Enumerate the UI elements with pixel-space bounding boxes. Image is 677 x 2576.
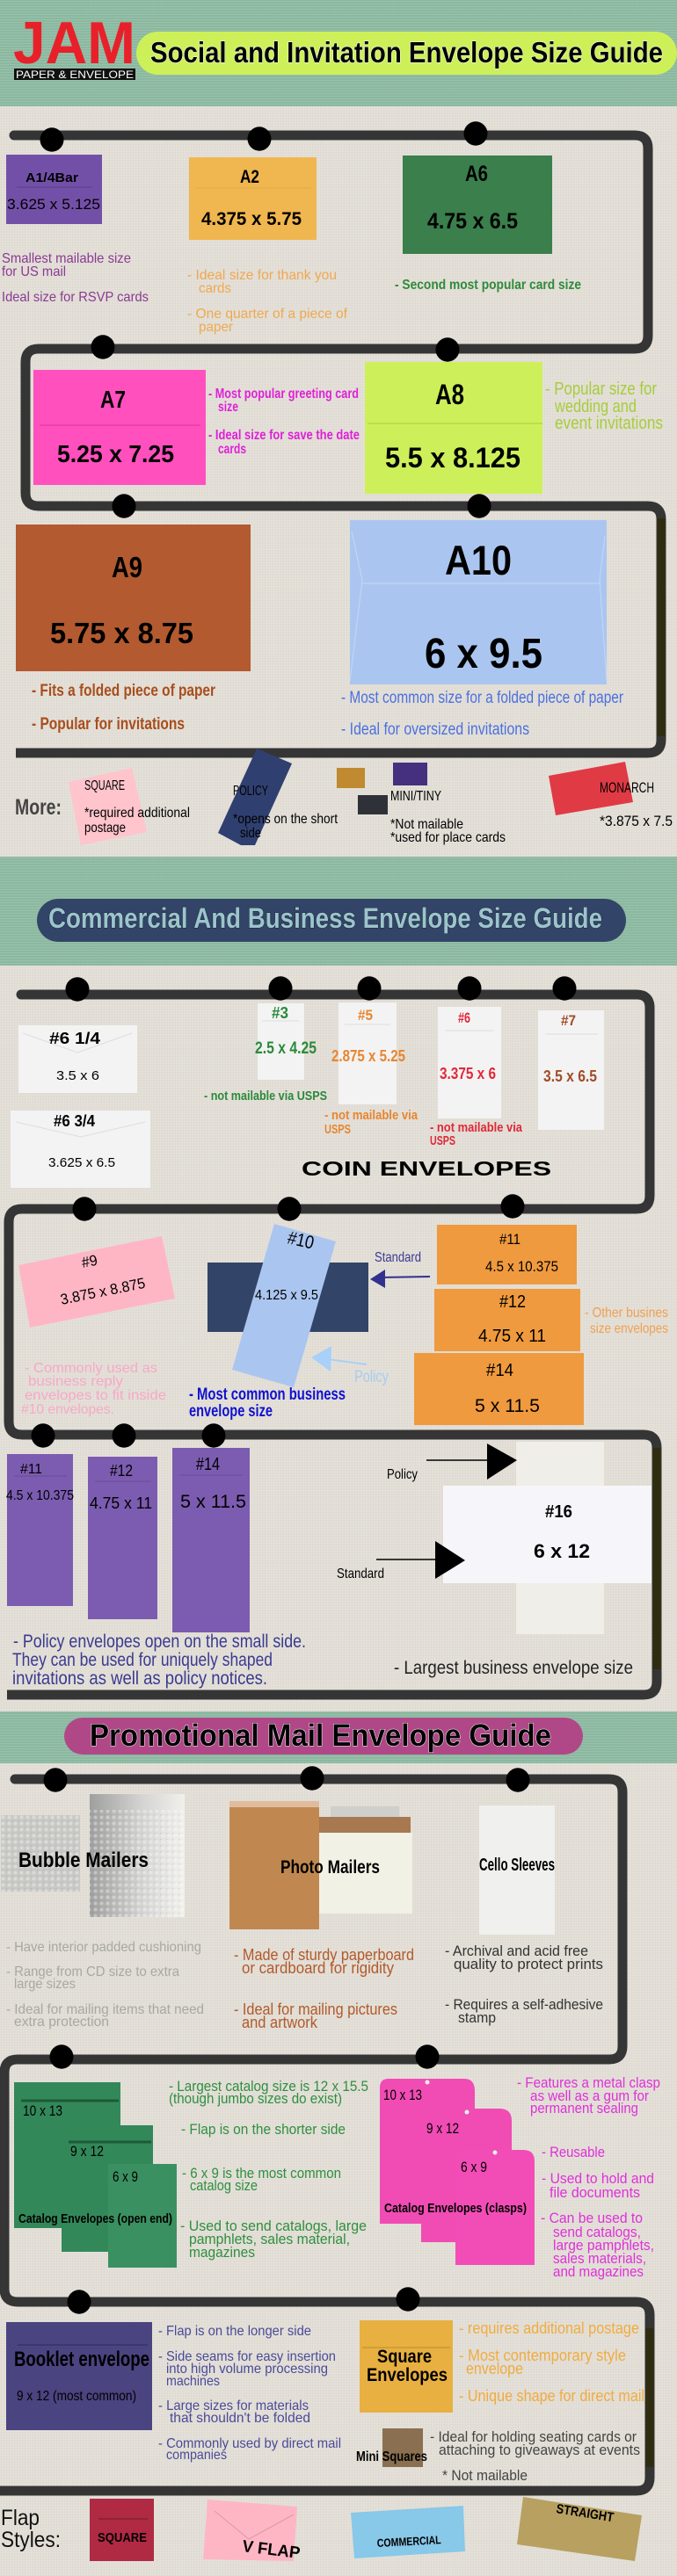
notes: square <box>459 2319 644 2405</box>
envelope: mini/tiny <box>337 763 506 845</box>
notes: A1/4Bar: Smallest mailable size <box>2 251 131 266</box>
notes: mini squares: attaching to giveaways at events <box>439 2442 640 2458</box>
flap: straight: STRAIGHT <box>555 2501 615 2525</box>
notes: catalog clasps: and magazines <box>553 2263 644 2280</box>
envelopes: catalog clasps: 6 x 9 <box>461 2159 487 2175</box>
envelope: #14 policy: #14 <box>196 1455 220 1474</box>
image: bubble mailers <box>1 1794 185 1917</box>
envelope: #3 <box>255 1003 317 1080</box>
envelope: #7: 3.5 x 6.5 <box>543 1067 597 1085</box>
note: #5: - not mailable via <box>324 1108 419 1123</box>
notes: square: - requires additional postage <box>459 2319 639 2337</box>
envelope: A6 <box>403 156 552 254</box>
notes: catalog open end: pamphlets, sales material, <box>189 2231 350 2247</box>
notes: bubble mailers: - Have interior padded cushioning <box>6 1940 201 1955</box>
envelopes: catalog clasps: 10 x 13 <box>383 2087 422 2103</box>
notes: mini squares: - Ideal for holding seating cards or <box>430 2428 637 2445</box>
notes: square: envelope <box>466 2360 523 2377</box>
title: commercial and business: Commercial And Business Envelope Size Guide <box>48 902 602 934</box>
notes: A7: cards <box>218 442 246 457</box>
notes: A1/4Bar <box>2 251 149 305</box>
envelope: #7 <box>538 1010 604 1130</box>
notes: catalog open end: (though jumbo sizes do exist) <box>169 2090 342 2107</box>
envelope: square: SQUARE <box>84 778 125 793</box>
notes: #9: envelopes to fit inside <box>25 1388 166 1403</box>
envelope: #6: 3.375 x 6 <box>440 1065 496 1082</box>
envelope: square <box>69 768 190 845</box>
notes: photo mailers <box>234 1946 414 2031</box>
note: A6: - Second most popular card size <box>395 278 581 293</box>
envelope: policy: POLICY <box>233 784 268 799</box>
envelope: policy <box>218 749 338 845</box>
notes: catalog clasps: - Can be used to <box>541 2210 643 2226</box>
note: #6 <box>430 1120 523 1148</box>
envelope: #12 orange: #12 <box>499 1292 526 1312</box>
envelope: #16: #16 <box>545 1502 572 1522</box>
notes: bubble mailers: extra protection <box>14 2015 109 2030</box>
envelope: #16 <box>443 1442 652 1634</box>
notes: A8: wedding and <box>554 397 637 416</box>
notes: catalog clasps: permanent sealing <box>530 2100 638 2117</box>
arrow: standard to #16: Standard <box>337 1567 384 1581</box>
image: bubble mailers: Bubble Mailers <box>18 1849 149 1872</box>
notes: A10 <box>341 689 624 739</box>
envelopes: catalog open end: 6 x 9 <box>113 2168 138 2185</box>
notes: booklet: machines <box>166 2374 220 2389</box>
envelope: A8: 5.5 x 8.125 <box>385 442 520 474</box>
notes: #9 <box>21 1361 166 1417</box>
envelope: #12 policy: #12 <box>110 1462 133 1480</box>
envelope: A10: 6 x 9.5 <box>425 631 542 677</box>
notes: booklet: into high volume processing <box>166 2362 328 2377</box>
envelope: #9: #9 <box>80 1252 98 1271</box>
envelope: A9: 5.75 x 8.75 <box>50 617 193 649</box>
notes: catalog clasps: - Reusable <box>542 2144 605 2160</box>
envelope: square: Square <box>377 2347 432 2367</box>
notes: catalog open end: catalog size <box>190 2177 258 2194</box>
notes: A2: - One quarter of a piece of <box>187 307 348 322</box>
notes: cello sleeves: - Archival and acid free <box>445 1943 588 1959</box>
notes: catalog clasps: send catalogs, <box>553 2224 641 2240</box>
notes: bubble mailers: - Range from CD size to extra <box>6 1965 179 1979</box>
envelope: #10 standard and policy <box>207 1224 368 1387</box>
notes: photo mailers: - Ideal for mailing pictures <box>234 2001 397 2018</box>
envelopes: catalog clasps <box>380 2079 535 2265</box>
flap: straight <box>517 2497 642 2561</box>
note: #5: USPS <box>324 1122 351 1137</box>
image: photo mailers <box>229 1801 412 1929</box>
notes: catalog clasps: file documents <box>550 2184 640 2201</box>
notes: #9: business reply <box>28 1374 123 1389</box>
notes: A2: paper <box>199 320 234 335</box>
notes: square: - Unique shape for direct mail <box>459 2387 644 2405</box>
envelope: #11 policy: #11 <box>20 1462 42 1477</box>
envelope: mini/tiny: *used for place cards <box>390 830 506 845</box>
notes: #10: - Most common business <box>189 1386 346 1404</box>
envelope: square <box>360 2320 453 2413</box>
notes: cello sleeves: quality to protect prints <box>454 1956 603 1972</box>
envelope: booklet <box>6 2322 152 2430</box>
envelope: #3: 2.5 x 4.25 <box>255 1039 317 1058</box>
envelope: monarch: MONARCH <box>600 779 654 796</box>
notes: A7 <box>208 387 360 457</box>
notes: A9: - Fits a folded piece of paper <box>32 682 215 700</box>
envelope: #11 orange: 4.5 x 10.375 <box>485 1258 558 1275</box>
envelope: A8 <box>365 362 542 494</box>
envelope: policy: *opens on the short <box>233 812 338 827</box>
envelope: #11 orange <box>437 1225 577 1284</box>
notes: A8: - Popular size for <box>545 380 657 399</box>
notes: cello sleeves: stamp <box>458 2009 496 2026</box>
envelope: A2 <box>189 157 317 240</box>
envelopes: catalog open end: 9 x 12 <box>70 2143 104 2160</box>
envelope: #6 1/4: 3.5 x 6 <box>56 1068 99 1083</box>
notes: A2: - Ideal size for thank you <box>187 268 337 283</box>
envelope: A1/4Bar: A1/4Bar <box>25 170 78 185</box>
arrow: policy: Policy <box>354 1368 389 1386</box>
envelopes: catalog clasps: Catalog Envelopes (clasps) <box>384 2201 527 2216</box>
notes: policy envelopes: - Policy envelopes open on the small side. <box>13 1632 306 1652</box>
notes: policy envelopes: They can be used for uniquely shaped <box>12 1650 273 1670</box>
notes: mini squares <box>430 2428 640 2484</box>
note: #6: USPS <box>430 1133 455 1148</box>
note: other business sizes <box>585 1306 668 1336</box>
envelope: A6: A6 <box>465 162 488 186</box>
envelope: policy: side <box>240 826 261 841</box>
envelope: A2: 4.375 x 5.75 <box>201 209 302 229</box>
envelope: A10: A10 <box>445 537 512 583</box>
notes: catalog open end: - Flap is on the shorter side <box>181 2121 346 2138</box>
envelope: booklet: Booklet envelope <box>14 2348 149 2371</box>
envelope: #11 policy <box>6 1454 74 1606</box>
notes: #10: envelope size <box>189 1402 273 1421</box>
note: #5 <box>324 1108 419 1137</box>
note: #6: - not mailable via <box>430 1120 523 1135</box>
envelope: #5: 2.875 x 5.25 <box>331 1047 405 1065</box>
envelope: A7: A7 <box>100 386 126 413</box>
notes: catalog clasps <box>517 2074 660 2280</box>
notes: A9 <box>32 682 215 734</box>
notes: catalog clasps: as well as a gum for <box>530 2088 649 2104</box>
notes: bubble mailers: - Ideal for mailing items that need <box>6 2002 204 2017</box>
title: commercial and business <box>37 899 626 942</box>
envelope: #6 1/4: #6 1/4 <box>49 1030 100 1047</box>
label: coin envelopes: COIN ENVELOPES <box>302 1157 551 1180</box>
logo: JAM Paper & Envelope: JAM <box>13 10 135 76</box>
envelopes: catalog clasps: 9 x 12 <box>426 2120 459 2137</box>
envelope: #12 orange <box>434 1289 580 1351</box>
notes: policy envelopes: invitations as well as policy notices. <box>12 1668 267 1689</box>
envelope: #14 orange <box>414 1353 584 1425</box>
notes: A10: - Ideal for oversized invitations <box>341 720 529 739</box>
envelope: #11 policy: 4.5 x 10.375 <box>6 1488 74 1503</box>
envelope: #6 3/4: 3.625 x 6.5 <box>48 1155 115 1170</box>
notes: catalog clasps: - Features a metal clasp <box>517 2074 660 2091</box>
notes: bubble mailers <box>6 1940 204 2030</box>
envelope: #6: #6 <box>458 1009 470 1026</box>
notes: booklet <box>158 2324 341 2463</box>
envelopes: catalog open end: 10 x 13 <box>23 2102 62 2119</box>
envelope: square: *required additional <box>84 806 190 821</box>
envelope: #6 3/4 <box>11 1111 150 1188</box>
timeline path: commercial section <box>7 976 657 1699</box>
notes: catalog clasps: large pamphlets, <box>553 2237 654 2254</box>
envelope: #14 orange: #14 <box>486 1361 513 1380</box>
notes: booklet: that shouldn't be folded <box>170 2411 310 2426</box>
envelope: mini squares <box>356 2428 427 2467</box>
notes: A8 <box>545 380 663 433</box>
envelope: #7: #7 <box>561 1012 576 1029</box>
envelope: #10 standard and policy: #10 <box>286 1227 316 1254</box>
envelope: #5: #5 <box>358 1007 373 1024</box>
heading: flap styles <box>1 2506 61 2552</box>
envelope: #9 <box>18 1236 175 1328</box>
envelope: #5 <box>331 1002 405 1104</box>
envelope: A8: A8 <box>435 379 464 410</box>
image: photo mailers: Photo Mailers <box>280 1857 380 1878</box>
notes: catalog open end: - Largest catalog size is 12 x 15.5 <box>169 2078 368 2095</box>
notes: A2: cards <box>199 281 231 296</box>
timeline path: promotional section <box>0 1766 650 2491</box>
envelope: mini/tiny: MINI/TINY <box>390 789 441 804</box>
notes: A7: - Most popular greeting card <box>208 387 359 402</box>
envelope: #12 orange: 4.75 x 11 <box>478 1327 546 1346</box>
envelope: booklet: 9 x 12 (most common) <box>17 2389 136 2404</box>
arrow: standard <box>370 1250 430 1288</box>
logo: JAM Paper & Envelope: PAPER & ENVELOPE <box>16 69 134 81</box>
envelope: monarch <box>549 762 673 829</box>
envelope: #6 1/4 <box>18 1025 137 1093</box>
notes: policy envelopes <box>12 1632 306 1689</box>
notes: catalog clasps: sales materials, <box>553 2250 646 2267</box>
flap: square: SQUARE <box>98 2530 147 2545</box>
notes: catalog clasps: - Used to hold and <box>542 2170 654 2187</box>
envelope: A7: 5.25 x 7.25 <box>57 440 174 467</box>
envelopes: catalog open end: Catalog Envelopes (open end) <box>18 2211 172 2226</box>
flap: commercial: COMMERCIAL <box>376 2533 441 2550</box>
notes: mini squares: * Not mailable <box>442 2467 528 2484</box>
notes: A2 <box>187 268 348 335</box>
notes: catalog open end <box>169 2078 368 2261</box>
notes: booklet: - Flap is on the longer side <box>158 2324 311 2339</box>
envelope: mini/tiny: *Not mailable <box>390 817 463 832</box>
heading: More: More: <box>15 795 62 820</box>
flap: V flap <box>203 2500 302 2563</box>
notes: A1/4Bar: Ideal size for RSVP cards <box>2 290 149 305</box>
envelope: #12 policy: 4.75 x 11 <box>90 1494 152 1512</box>
envelope: A1/4Bar <box>6 155 102 224</box>
notes: #9: #10 envelopes. <box>21 1402 114 1417</box>
notes: booklet: - Commonly used by direct mail <box>158 2436 341 2451</box>
notes: A7: size <box>218 400 238 415</box>
envelope: A6: 4.75 x 6.5 <box>427 209 518 234</box>
arrow: policy <box>311 1346 389 1386</box>
notes: catalog open end: magazines <box>189 2244 255 2261</box>
envelope: A9: A9 <box>112 551 142 583</box>
note: #16: - Largest business envelope size <box>394 1658 633 1678</box>
timeline path: social section <box>14 121 661 758</box>
envelope: #3: #3 <box>272 1004 288 1022</box>
envelope: #14 policy <box>172 1448 250 1632</box>
envelope: #11 orange: #11 <box>499 1231 520 1248</box>
envelope: #16: 6 x 12 <box>534 1540 590 1562</box>
heading: flap styles: Flap <box>1 2506 40 2530</box>
envelope: square: Envelopes <box>367 2365 448 2385</box>
arrow: standard to #16 <box>337 1541 465 1581</box>
notes: booklet: - Side seams for easy insertion <box>158 2349 336 2364</box>
notes: booklet: companies <box>166 2448 227 2463</box>
heading: flap styles: Styles: <box>1 2528 61 2552</box>
title: promotional mail: Promotional Mail Envelope Guide <box>90 1719 551 1753</box>
envelope: #6 3/4: #6 3/4 <box>54 1112 95 1130</box>
envelope: #12 policy <box>88 1457 157 1619</box>
flap: V flap: V FLAP <box>241 2537 302 2563</box>
envelope: square: postage <box>84 821 126 836</box>
notes: bubble mailers: large sizes <box>14 1977 76 1992</box>
notes: photo mailers: - Made of sturdy paperboard <box>234 1946 414 1964</box>
envelope: A2: A2 <box>240 167 259 187</box>
arrow: policy to #16: Policy <box>387 1467 418 1482</box>
envelope: A10 <box>350 520 607 684</box>
image: cello sleeves: Cello Sleeves <box>479 1856 555 1875</box>
envelope: #14 orange: 5 x 11.5 <box>475 1396 540 1416</box>
notes: cello sleeves: - Requires a self-adhesive <box>445 1996 603 2013</box>
notes: #10 <box>189 1386 346 1421</box>
notes: photo mailers: or cardboard for rigidity <box>242 1959 394 1977</box>
notes: square: - Most contemporary style <box>459 2347 626 2364</box>
envelope: #14 policy: 5 x 11.5 <box>180 1492 246 1512</box>
notes: #9: - Commonly used as <box>25 1361 157 1376</box>
envelopes: catalog open end <box>14 2082 177 2268</box>
note: #3: - not mailable via USPS <box>204 1089 327 1103</box>
envelope: A9 <box>16 525 251 671</box>
envelope: #10 standard and policy: 4.125 x 9.5 <box>255 1288 318 1303</box>
notes: photo mailers: and artwork <box>242 2014 318 2031</box>
envelope: #6 <box>438 1007 501 1118</box>
arrow: policy to #16 <box>387 1444 517 1482</box>
envelope: #9: 3.875 x 8.875 <box>59 1275 147 1308</box>
notes: catalog open end: - Used to send catalogs, large <box>180 2218 367 2234</box>
notes: A9: - Popular for invitations <box>32 715 185 734</box>
notes: catalog open end: - 6 x 9 is the most common <box>182 2165 341 2182</box>
envelope: A1/4Bar: 3.625 x 5.125 <box>7 196 100 213</box>
flap: square <box>90 2499 154 2561</box>
envelope: mini squares: Mini Squares <box>356 2449 427 2464</box>
image: cello sleeves <box>479 1805 555 1935</box>
notes: A7: - Ideal size for save the date <box>208 428 360 443</box>
flap: commercial <box>351 2506 465 2558</box>
notes: cello sleeves <box>445 1943 603 2026</box>
arrow: standard: Standard <box>375 1250 421 1265</box>
notes: booklet: - Large sizes for materials <box>158 2399 309 2413</box>
notes: A1/4Bar: for US mail <box>2 264 66 279</box>
envelope: A7 <box>33 370 206 485</box>
